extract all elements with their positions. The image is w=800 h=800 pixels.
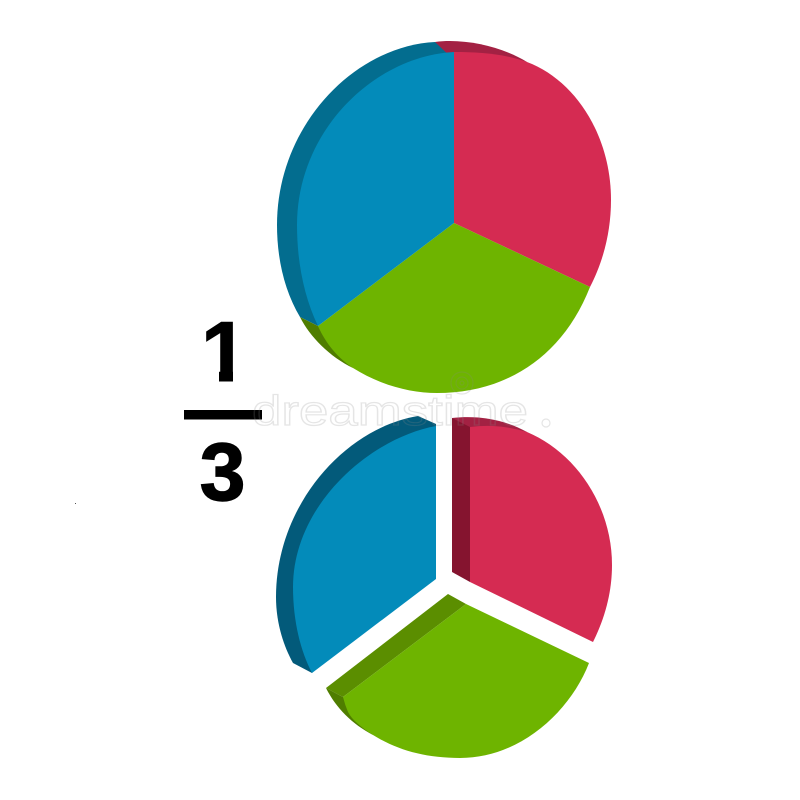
whole 3D pie chart [277, 41, 611, 393]
blue slice [297, 52, 454, 326]
fraction one third [184, 322, 262, 502]
watermark registered mark [542, 419, 550, 427]
small stray dot [75, 503, 76, 504]
watermark wordmark: dreamstime [252, 387, 528, 434]
green piece top face [343, 604, 589, 758]
green side wall [300, 317, 353, 368]
blue piece side wall [276, 416, 436, 673]
green piece outer wall [326, 688, 373, 735]
infographic canvas [75, 41, 612, 758]
fraction bar [184, 410, 262, 420]
red piece top face [470, 426, 612, 642]
green piece inner wall [326, 594, 466, 697]
exploded 3D pie chart [276, 416, 612, 758]
watermark spiral logo [451, 372, 473, 394]
red back wall [435, 41, 527, 62]
numerator: 1 [201, 305, 248, 400]
red piece back wall [452, 417, 527, 435]
green slice [318, 223, 590, 393]
blue piece top face [293, 426, 436, 673]
denominator: 3 [200, 427, 245, 518]
stock watermark [252, 372, 550, 434]
red slice [454, 52, 611, 287]
red piece inner wall [452, 418, 470, 582]
blue side wall [277, 42, 454, 326]
